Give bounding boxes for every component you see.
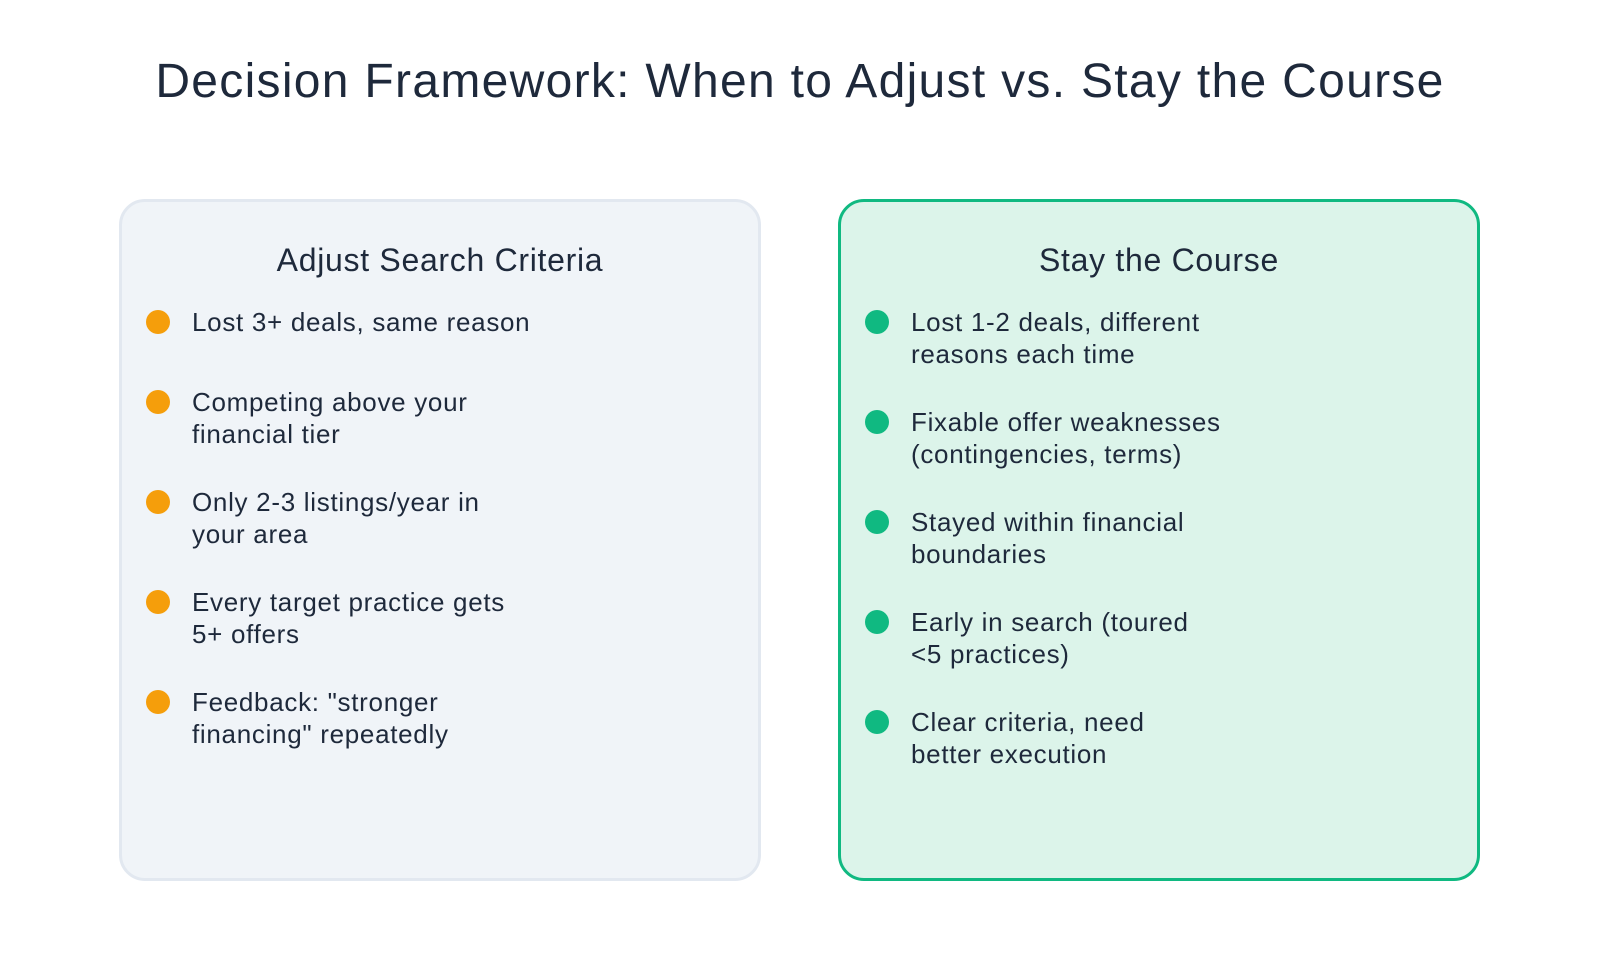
item 4: Every target practice gets <box>192 587 505 617</box>
item 2: (contingencies, terms) <box>911 439 1182 469</box>
item 3: boundaries <box>911 539 1047 569</box>
item 1: reasons each time <box>911 339 1135 369</box>
item 4 <box>146 587 505 649</box>
item 4: Early in search (toured <box>911 607 1189 637</box>
item 2 <box>865 407 1221 469</box>
item 4: 5+ offers <box>192 619 300 649</box>
item 2 <box>146 387 468 449</box>
item 2: financial tier <box>192 419 341 449</box>
item 2: Fixable offer weaknesses <box>911 407 1221 437</box>
item 5: Clear criteria, need <box>911 707 1145 737</box>
item 1 <box>865 307 1200 369</box>
item 5 <box>146 687 449 749</box>
item 2: Competing above your <box>192 387 468 417</box>
item 1: Lost 1-2 deals, different <box>911 307 1200 337</box>
item 5: Feedback: "stronger <box>192 687 439 717</box>
heading: stay: Stay the Course <box>1039 242 1279 278</box>
heading: adjust: Adjust Search Criteria <box>277 242 603 278</box>
item 5: better execution <box>911 739 1107 769</box>
item 3: your area <box>192 519 308 549</box>
item 4 <box>865 607 1189 669</box>
item 4: <5 practices) <box>911 639 1070 669</box>
item 3 <box>146 487 480 549</box>
item 3 <box>865 507 1184 569</box>
item 3: Only 2-3 listings/year in <box>192 487 480 517</box>
item 5: financing" repeatedly <box>192 719 449 749</box>
title: Decision Framework: When to Adjust vs. Stay the Course <box>155 55 1445 108</box>
panel: adjust search criteria <box>119 199 761 881</box>
item 5 <box>865 707 1145 769</box>
item 1: Lost 3+ deals, same reason <box>192 307 530 337</box>
item 3: Stayed within financial <box>911 507 1184 537</box>
panel: stay the course <box>838 199 1480 881</box>
